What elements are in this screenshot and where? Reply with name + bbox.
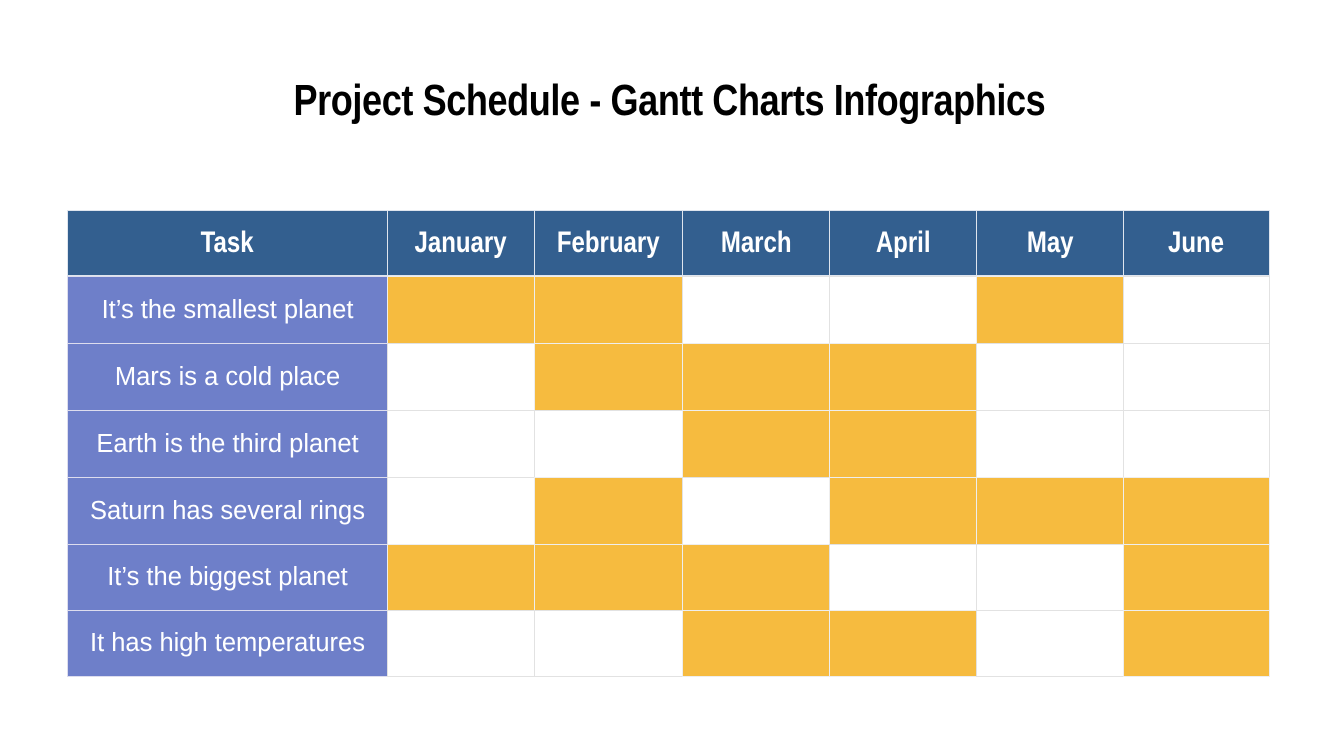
header row: June xyxy=(1168,226,1225,259)
row 3 xyxy=(67,410,388,478)
row 2: Mars is a cold place xyxy=(115,362,340,390)
task rows xyxy=(67,276,1270,677)
header row: January xyxy=(415,226,507,259)
header row: Task xyxy=(201,226,254,259)
row 4: Saturn has several rings xyxy=(90,496,365,524)
row 1: It’s the smallest planet xyxy=(102,296,353,324)
row 6 xyxy=(67,610,388,677)
row 3: Earth is the third planet xyxy=(96,430,359,458)
title: Project Schedule - Gantt Charts Infographics xyxy=(293,76,1045,125)
row 5: It’s the biggest planet xyxy=(107,563,348,591)
header row: February xyxy=(557,226,660,259)
row 1 xyxy=(67,276,388,344)
header row: March xyxy=(721,226,791,259)
row 5 xyxy=(67,544,388,611)
header row xyxy=(67,210,1270,276)
row 2 xyxy=(67,343,388,411)
row 4 xyxy=(67,477,388,545)
row 6: It has high temperatures xyxy=(90,629,365,657)
header row: May xyxy=(1027,226,1073,259)
header row: April xyxy=(876,226,930,259)
gantt table xyxy=(67,210,1270,677)
